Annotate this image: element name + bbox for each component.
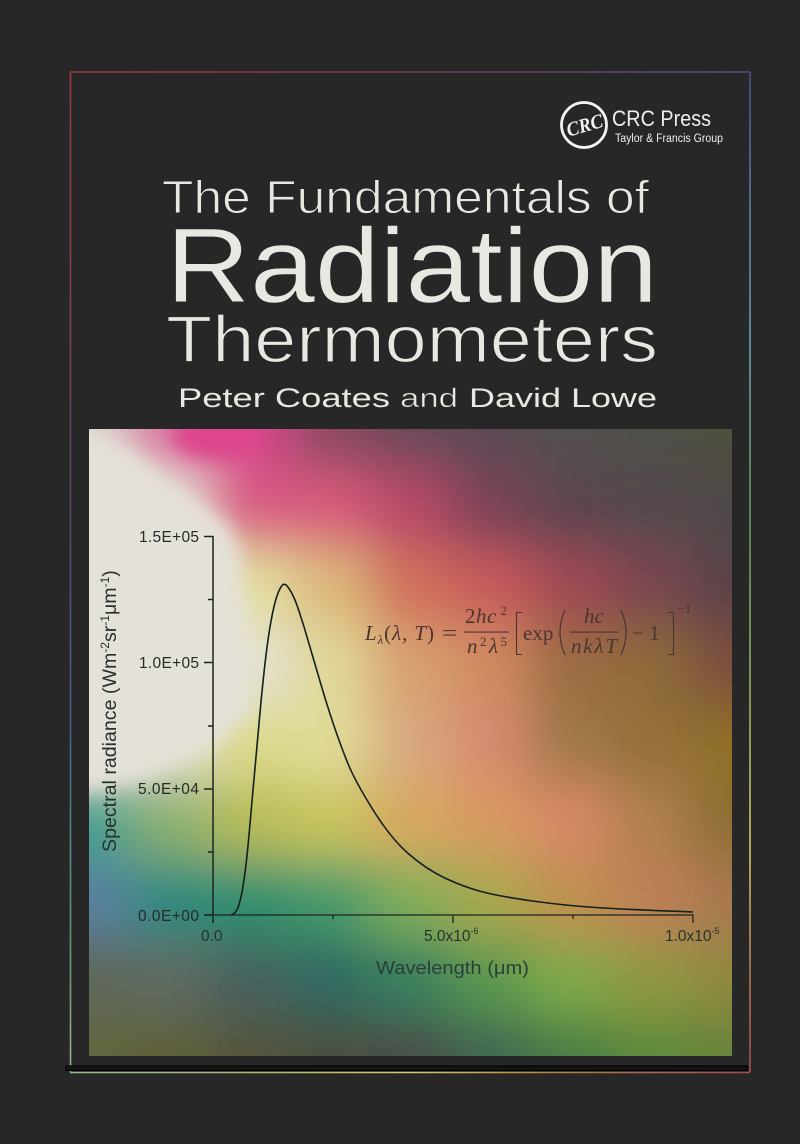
x axis labels	[201, 926, 720, 945]
title line 1: The Fundamentals of	[162, 171, 649, 223]
icon: CRC roundel	[562, 102, 606, 148]
equation: Planck's law: λ, T)	[392, 621, 434, 645]
black rule at bottom	[66, 1066, 747, 1070]
publisher logo: CRC Press	[562, 102, 723, 148]
publisher group: Taylor & Francis Group	[615, 133, 723, 145]
equation: Planck's law: 5	[500, 634, 507, 649]
x axis labels: -6	[471, 926, 479, 936]
equation: Planck's law	[364, 601, 691, 658]
equation: Planck's law: λ	[377, 632, 384, 647]
icon: CRC roundel: CRC	[564, 110, 606, 141]
y axis labels: 1.5E+05	[139, 529, 199, 546]
authors	[178, 383, 657, 413]
panel: spectrum background	[89, 429, 732, 1056]
x axis labels: -5	[712, 926, 720, 936]
connector word: and	[400, 383, 458, 413]
equation: Planck's law: 2hc	[465, 604, 496, 628]
equation: Planck's law: hc	[584, 604, 604, 628]
title line 2: Radiation	[166, 207, 658, 325]
equation: Planck's law: (	[384, 621, 391, 645]
equation: Planck's law: 2	[497, 603, 507, 618]
book cover	[66, 71, 751, 1074]
x axis labels: 5.0x10	[424, 928, 471, 945]
y axis labels	[138, 529, 199, 925]
chart: Planck spectral radiance curve	[98, 529, 720, 978]
y axis	[204, 536, 213, 923]
equation: Planck's law: λ	[488, 634, 498, 658]
x axis labels: 0.0	[201, 928, 223, 945]
equation: Planck's law: exp	[523, 621, 553, 645]
equation: Planck's law: =	[442, 620, 457, 645]
equation: Planck's law: n	[467, 634, 478, 658]
equation: Planck's law: nkλT	[571, 634, 618, 658]
equation: Planck's law: L	[365, 621, 377, 645]
equation: Planck's law: − 1	[632, 621, 660, 645]
x axis title: Wavelength (μm)	[376, 957, 529, 978]
title	[162, 171, 658, 376]
y axis title: Spectral radiance (Wm	[99, 653, 121, 852]
y axis title: sr	[99, 625, 121, 642]
title line 3: Thermometers	[166, 303, 658, 376]
y axis title: -1	[98, 576, 112, 587]
y axis title: )	[99, 570, 121, 577]
x axis	[204, 915, 694, 923]
rainbow border frame	[70, 72, 750, 1072]
author 2: David Lowe	[469, 383, 657, 413]
publisher name: CRC Press	[612, 106, 711, 131]
equation: Planck's law: −1	[677, 601, 691, 616]
y axis labels: 0.0E+00	[138, 908, 199, 925]
spectral curve	[231, 584, 693, 915]
y axis title: -1	[98, 615, 112, 626]
y axis labels: 5.0E+04	[138, 781, 199, 798]
y axis title: μm	[99, 587, 121, 615]
y axis labels: 1.0E+05	[139, 655, 199, 672]
author 1: Peter Coates	[178, 383, 390, 413]
y axis title: -2	[98, 642, 112, 653]
equation: Planck's law: 2	[480, 634, 486, 649]
x axis labels: 1.0x10	[665, 928, 712, 945]
